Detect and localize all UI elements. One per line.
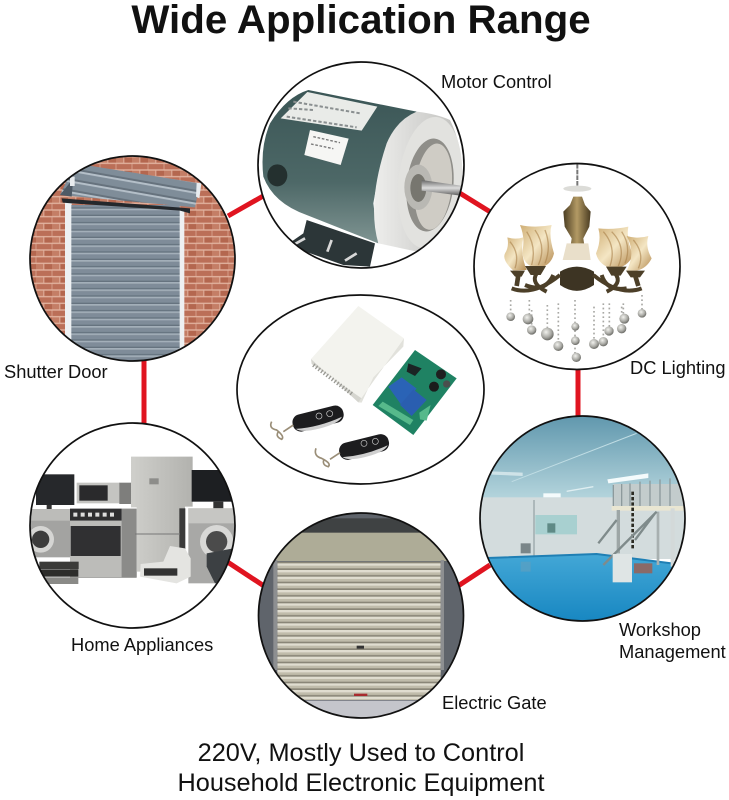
floor	[250, 701, 473, 724]
label: workshop management: Management	[619, 641, 726, 662]
remote two	[315, 432, 391, 467]
gate frame	[273, 560, 444, 670]
label: electric gate: Electric Gate	[442, 692, 547, 713]
blue floor	[489, 555, 672, 620]
remote one	[271, 404, 346, 439]
gate slats	[277, 562, 441, 700]
left TV	[36, 474, 74, 509]
ceiling lights	[492, 471, 648, 497]
label: DC lighting: DC Lighting	[630, 357, 726, 378]
red connectors	[144, 192, 578, 586]
footer caption: 220V, Mostly Used to Control	[198, 739, 524, 767]
label: motor control: Motor Control	[441, 71, 552, 92]
motor bell end	[374, 112, 468, 252]
ceiling	[483, 416, 678, 498]
white receiver case	[311, 306, 404, 403]
DVD players	[39, 562, 79, 584]
shutter curtain	[71, 205, 180, 362]
glass shades	[504, 225, 652, 271]
floor reflection	[521, 562, 531, 572]
dark brick surround	[259, 514, 463, 701]
motor port	[267, 164, 287, 186]
fridge	[131, 457, 193, 572]
panel: workshop management	[479, 415, 686, 622]
brick wall	[30, 156, 234, 346]
shutter housing	[60, 163, 201, 213]
central stem	[560, 197, 594, 291]
chain and canopy	[563, 164, 591, 192]
label: workshop management: Workshop	[619, 619, 701, 640]
label: home appliances: Home Appliances	[71, 634, 213, 655]
footer caption: Household Electronic Equipment	[177, 769, 545, 797]
panel: shutter door	[29, 155, 236, 362]
motor body	[262, 90, 417, 243]
panel: home appliances	[27, 423, 235, 628]
mezzanine and stairs	[598, 478, 690, 582]
left washer	[27, 509, 71, 557]
motor labels	[281, 92, 377, 165]
label: shutter door: Shutter Door	[4, 361, 108, 382]
scrolled bronze arms	[512, 273, 642, 292]
shade cups	[510, 266, 645, 277]
right TV	[192, 470, 235, 508]
printer	[140, 546, 191, 583]
glass swirl	[510, 230, 641, 268]
oven	[70, 509, 137, 578]
panel: DC lighting	[474, 164, 680, 370]
panel: central product	[237, 295, 484, 484]
panel: electric gate	[258, 512, 464, 719]
right washer	[188, 508, 235, 583]
microwave	[77, 483, 134, 504]
panel: motor control	[258, 62, 468, 268]
door guide rails	[65, 202, 184, 362]
gate header	[263, 533, 450, 561]
lock and handle	[354, 646, 367, 696]
crystal strands	[511, 295, 642, 357]
circuit board	[373, 350, 457, 435]
wall	[480, 497, 684, 559]
motor foot	[287, 220, 375, 267]
